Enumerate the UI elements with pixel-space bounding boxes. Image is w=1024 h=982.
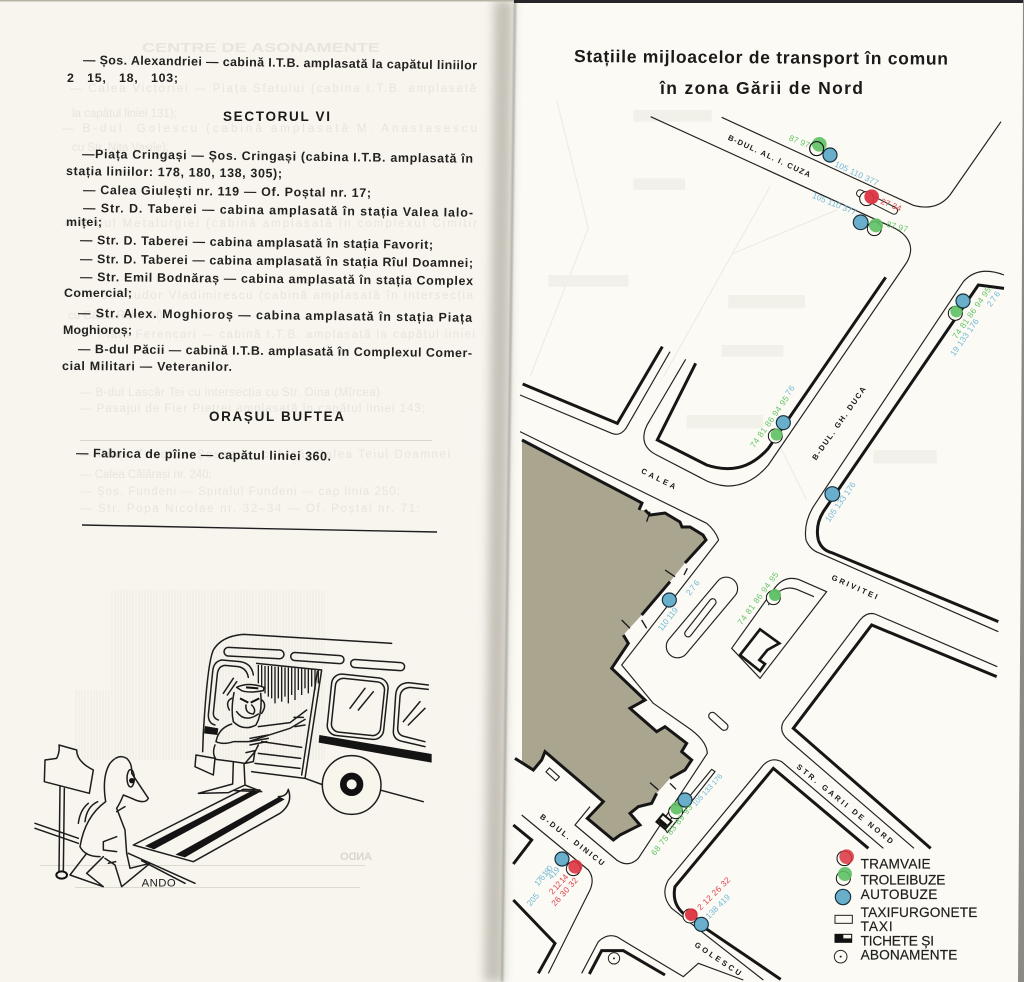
stop: Duca east xyxy=(948,285,1002,358)
legend: tickets and subscriptions: ABONAMENTE xyxy=(861,947,957,962)
stop: Dinicu: 419 xyxy=(546,864,562,881)
stop: Dinicu: 205 xyxy=(525,891,541,908)
legend: tickets and subscriptions xyxy=(834,933,957,963)
stop: station front bus: 276 xyxy=(684,578,702,597)
text block: sector VI list: —Piața Cringași — Șos. Cringași (cabina I.T.B. amplasată în xyxy=(82,147,473,166)
street labels south: GRIVITEI xyxy=(830,573,879,601)
stop: Duca east: 19 133 176 xyxy=(948,316,981,358)
stop: Cuza south: 27 34 xyxy=(879,196,903,213)
roads north xyxy=(520,117,1004,540)
text block: sector V end: 2 15, 18, 103; xyxy=(67,71,178,85)
legend: tramvaie: TRAMVAIE xyxy=(861,857,931,872)
station map: south part xyxy=(513,440,998,980)
arms and torso xyxy=(216,710,307,745)
stop: Duca east: 74 81 86 94 95 xyxy=(950,285,993,340)
legend: tramvaie xyxy=(837,849,931,872)
stop: station front bus xyxy=(655,578,702,633)
stop: Grivitei trolleybus: 74 81 86 94 95 xyxy=(735,569,781,627)
station map: north part xyxy=(520,117,1004,540)
text block: sector VI list: miței; xyxy=(66,215,102,229)
map title: Stațiile mijloacelor de transport în comun xyxy=(574,46,948,69)
text block: sector VI list: — Calea Giulești nr. 119 — Of. Poștal nr. 17; xyxy=(83,183,371,200)
street labels north: B-DUL. GH. DUCA xyxy=(810,385,868,462)
legend: taxi xyxy=(835,905,977,934)
show-through text from the reverse page: — Calea Călărași nr. 240; xyxy=(80,469,212,481)
building outline xyxy=(515,440,706,840)
heading: Orașul Buftea: ORAȘUL BUFTEA xyxy=(209,409,344,424)
stop: Golescu: 2 12 26 32 xyxy=(695,875,733,912)
stop: Dinicu: 2 12 14 xyxy=(547,872,570,896)
stop: Dinicu: 26 30 32 xyxy=(549,875,580,908)
stop: Golescu xyxy=(683,875,733,931)
show-through text from the reverse page: — Șos. Fundeni — Spitalul Fundeni — cap linia 250; xyxy=(80,486,400,498)
wheel xyxy=(322,756,381,814)
show-through text from the reverse page: CENTRE DE ASONAMENTE xyxy=(142,40,380,55)
ramp with stripes xyxy=(133,789,290,862)
show-through text from the reverse page: — B-dul Metalurgiei (cabină amplasată în complexul Cimitir xyxy=(62,218,477,230)
icon: subscription point xyxy=(608,953,620,964)
show-through text from the reverse page xyxy=(40,40,477,888)
door steps xyxy=(255,742,302,768)
show-through text from the reverse page: ANDO xyxy=(340,851,372,863)
street labels south: B-DUL. DINICU xyxy=(538,812,607,868)
cap xyxy=(237,684,264,692)
railway station building xyxy=(522,440,706,840)
show-through text from the reverse page: — Str. Popa Nicolae nr. 32–34 — Of. Poștal nr. 71; xyxy=(80,503,420,515)
ground lines xyxy=(35,823,195,883)
stop: station side with taxi bar and tickets: 68 75 83 89 93 xyxy=(649,802,695,857)
show-through text from the reverse page: — Piața Ferencari — cabină I.T.B. amplasată la capătul liniei xyxy=(80,329,475,341)
traffic islands xyxy=(546,573,827,781)
stop: Cuza north: 87 97 xyxy=(788,133,812,150)
entrance markers xyxy=(622,512,687,790)
show-through text from the reverse page: — Pasajul de Fier Pietrei amplasată în capătul liniei 143; xyxy=(80,403,425,415)
illustration: conductor on bus and passenger xyxy=(35,634,432,890)
street labels south: GOLESCU xyxy=(693,940,743,978)
show-through text from the reverse page: — B-dul Tudor Vladimirescu (cabină amplasată în intersecția xyxy=(68,290,474,302)
signature: ANDO xyxy=(142,878,176,890)
text block: sector VI list: — Str. D. Taberei — cabina amplasată în stația Valea Ialo- xyxy=(83,201,473,220)
legend: taxi: TAXI xyxy=(861,919,893,934)
show-through map lines on the right page xyxy=(530,100,937,500)
legend: tickets and subscriptions: TICHETE ȘI xyxy=(861,933,934,948)
stop: Cuza south: 105 110 377 xyxy=(811,190,858,217)
stop: Cuza north: 105 110 377 xyxy=(833,159,881,188)
door curtain hatching xyxy=(258,665,318,703)
stop: Duca west: 74 81 86 94 95 xyxy=(748,393,791,449)
show-through text from the reverse page: cu Str. Nița Vasile); xyxy=(72,142,169,154)
face xyxy=(228,693,265,728)
show-through text from the reverse page: — B-dul. Golescu (cabină amplasată M. Anastasescu xyxy=(62,123,477,135)
text block: sector VI list: stația liniilor: 178, 180, 138, 305); xyxy=(66,164,282,181)
show-through text from the reverse page: cu Calea Rahovei); xyxy=(68,310,166,322)
lower body, bag and legs xyxy=(198,745,262,793)
text block: sector V end xyxy=(67,53,477,85)
stop: station side with taxi bar and tickets xyxy=(649,769,724,857)
stop: Duca south: 105 133 176 xyxy=(823,480,858,524)
stop sign and passenger xyxy=(35,745,195,887)
map title xyxy=(574,46,948,98)
stop: Duca west: 76 xyxy=(783,383,797,397)
text block: sector VI list: Comercial; xyxy=(64,286,132,300)
passenger xyxy=(70,757,150,887)
stop: Dinicu xyxy=(525,852,582,908)
legend: taxi: TAXIFURGONETE xyxy=(861,905,977,920)
text block: sector VI list: — Str. D. Taberei — cabina amplasată în stația Rîul Doamnei; xyxy=(80,252,473,270)
stop: Cuza north xyxy=(788,133,881,188)
conductor xyxy=(195,678,307,793)
street labels north xyxy=(640,133,868,491)
text block: sector VI list: — Str. D. Taberei — cabina amplasată în stația Favorit; xyxy=(80,233,433,252)
show-through text from the reverse page: — B-dul Lascăr Tei cu intersecția cu Str. Oina (Mîrcea) xyxy=(80,387,380,399)
text block: sector VI list: Moghioroș; xyxy=(63,323,132,337)
stop: Duca east: 276 xyxy=(984,289,1002,308)
legend: troleibuze xyxy=(836,867,945,887)
heading: Sectorul VI: SECTORUL VI xyxy=(223,109,330,124)
show-through text from the reverse page: la capătul liniei 131); xyxy=(72,108,177,120)
show-through text from the reverse page: — Piața Tudor — Șoseaua, cabină, Calea Teiul Doamnei xyxy=(80,449,450,461)
text block: sector VI list: — Str. Alex. Moghioroș — cabina amplasată în stația Piața xyxy=(78,306,472,325)
roads south xyxy=(513,540,998,980)
stop: Cuza south xyxy=(811,189,909,236)
stop: Cuza south: 87 97 xyxy=(885,219,909,234)
legend: autobuze xyxy=(835,887,937,905)
show-through text from the reverse page: — Calea Victoriei — Piața Sfatului (cabina I.T.B. amplasată xyxy=(70,83,477,95)
stop: Dinicu: 176 180 xyxy=(532,863,555,888)
text block: sector VI list: cial Militari — Veteranilor. xyxy=(62,359,232,374)
legend: autobuze: AUTOBUZE xyxy=(861,887,937,902)
map title: în zona Gării de Nord xyxy=(659,78,863,98)
left page text xyxy=(62,53,477,464)
legend xyxy=(834,849,977,963)
text block: sector VI list: — Str. Emil Bodnăraș — cabina amplasată în stația Complex xyxy=(80,270,473,288)
street labels north: CALEA xyxy=(640,466,678,491)
stop: station front bus: 110 119 xyxy=(655,605,680,633)
street labels south xyxy=(538,573,895,978)
stop sign xyxy=(44,745,93,879)
text block: sector V end: — Șos. Alexandriei — cabină I.T.B. amplasată la capătul liniilor xyxy=(83,53,477,73)
text block: sector VI list: — B-dul Păcii — cabină I.T.B. amplasată în Complexul Comer- xyxy=(78,342,472,360)
street labels south: STR. GARII DE NORD xyxy=(795,762,895,846)
legend: troleibuze: TROLEIBUZE xyxy=(861,872,945,887)
text block: sector VI list xyxy=(62,147,473,374)
street labels north: B-DUL. AL. I. CUZA xyxy=(726,133,812,179)
stop: station side with taxi bar and tickets: 105 133 176 xyxy=(690,772,724,808)
stop: Golescu: 138 419 xyxy=(703,892,732,921)
bus body xyxy=(203,634,432,802)
text block: Buftea: — Fabrica de pîine — capătul liniei 360. xyxy=(76,446,331,464)
